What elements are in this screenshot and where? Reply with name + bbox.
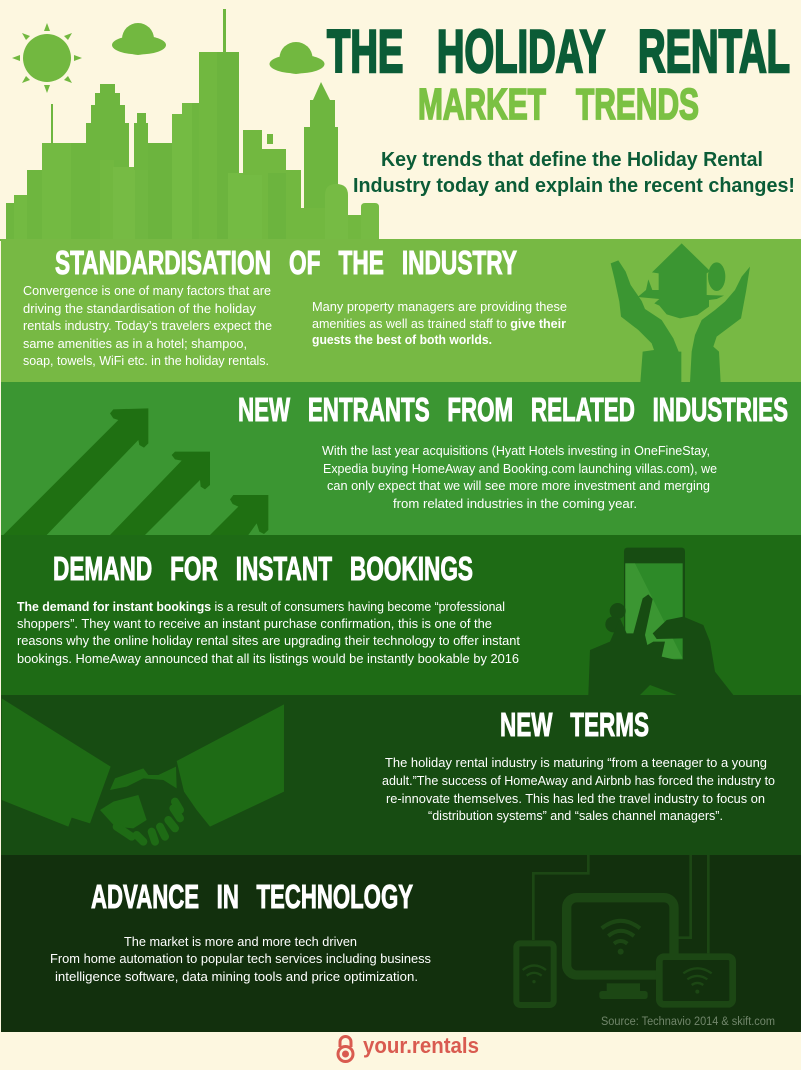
text block right: Many property managers are providing these xyxy=(312,299,567,314)
source note: Source: Technavio 2014 & skift.com xyxy=(601,1016,775,1028)
heading: DEMAND FOR INSTANT BOOKINGS xyxy=(53,550,473,587)
icon: rising arrows xyxy=(3,408,268,535)
intro text: Industry today and explain the recent changes! xyxy=(353,175,795,197)
text block left: same amenities as in a hotel; shampoo, xyxy=(23,336,247,351)
text block right: guests the best of both worlds. xyxy=(312,332,492,347)
text block: re-innovate themselves. This has led the travel industry to focus on xyxy=(386,791,765,806)
text block: adult.”The success of HomeAway and Airbnb has forced the industry to xyxy=(382,773,775,788)
text block: can only expect that we will see more more investment and merging xyxy=(327,478,710,493)
heading: NEW TERMS xyxy=(500,706,649,743)
panel: advance in technology xyxy=(1,855,801,1032)
intro text xyxy=(353,149,795,197)
text block: With the last year acquisitions (Hyatt Hotels investing in OneFineStay, xyxy=(322,443,710,458)
icon: hands holding house xyxy=(611,243,750,383)
panel: new entrants xyxy=(1,382,801,535)
text block: bookings. HomeAway announced that all its listings would be instantly bookable by 2016 xyxy=(17,651,519,666)
icon: sun xyxy=(12,23,82,93)
wordmark: your.rentals xyxy=(363,1033,479,1058)
text block left: driving the standardisation of the holiday xyxy=(23,301,256,316)
text block: reasons why the online holiday rental sites are upgrading their technology to offer instant xyxy=(17,633,520,648)
panel: standardisation xyxy=(1,239,801,383)
icon: hands on smartphone xyxy=(588,548,733,695)
text block: The holiday rental industry is maturing “from a teenager to a young xyxy=(385,755,767,770)
icon: handshake xyxy=(2,698,284,842)
text block: “distribution systems” and “sales channel managers”. xyxy=(428,808,723,823)
text block left xyxy=(23,283,272,368)
panel: instant bookings xyxy=(1,535,801,695)
text block: intelligence software, data mining tools and price optimization. xyxy=(55,969,418,984)
text block right: amenities as well as trained staff to give their xyxy=(312,316,566,331)
intro text: Key trends that define the Holiday Rental xyxy=(381,149,763,171)
heading: ADVANCE IN TECHNOLOGY xyxy=(91,878,413,915)
text block right xyxy=(312,299,567,347)
text block: The demand for instant bookings is a result of consumers having become “professional xyxy=(17,599,505,614)
text block: Expedia buying HomeAway and Booking.com launching villas.com), we xyxy=(323,461,717,476)
logo: your.rentals xyxy=(338,1033,479,1062)
text block: from related industries in the coming year. xyxy=(393,496,637,511)
text block left: Convergence is one of many factors that are xyxy=(23,283,271,298)
text block xyxy=(17,599,520,666)
panel: new terms xyxy=(1,695,801,855)
icon: padlock pin xyxy=(338,1036,353,1062)
icon: connected devices xyxy=(516,855,733,1005)
header panel with skyline xyxy=(0,9,379,241)
text block xyxy=(382,755,775,823)
text block xyxy=(322,443,717,511)
text block left: rentals industry. Today’s travelers expect the xyxy=(23,318,272,333)
icon: cloud right xyxy=(270,42,324,74)
text block left: soap, towels, WiFi etc. in the holiday rentals. xyxy=(23,353,269,368)
text block: The market is more and more tech driven xyxy=(124,934,357,949)
city skyline xyxy=(0,9,379,241)
text block xyxy=(50,934,431,984)
text block: shoppers”. They want to receive an instant purchase confirmation, this is one of the xyxy=(17,616,492,631)
text block: From home automation to popular tech services including business xyxy=(50,951,431,966)
icon: cloud left xyxy=(112,23,166,55)
heading: STANDARDISATION OF THE INDUSTRY xyxy=(55,244,517,281)
